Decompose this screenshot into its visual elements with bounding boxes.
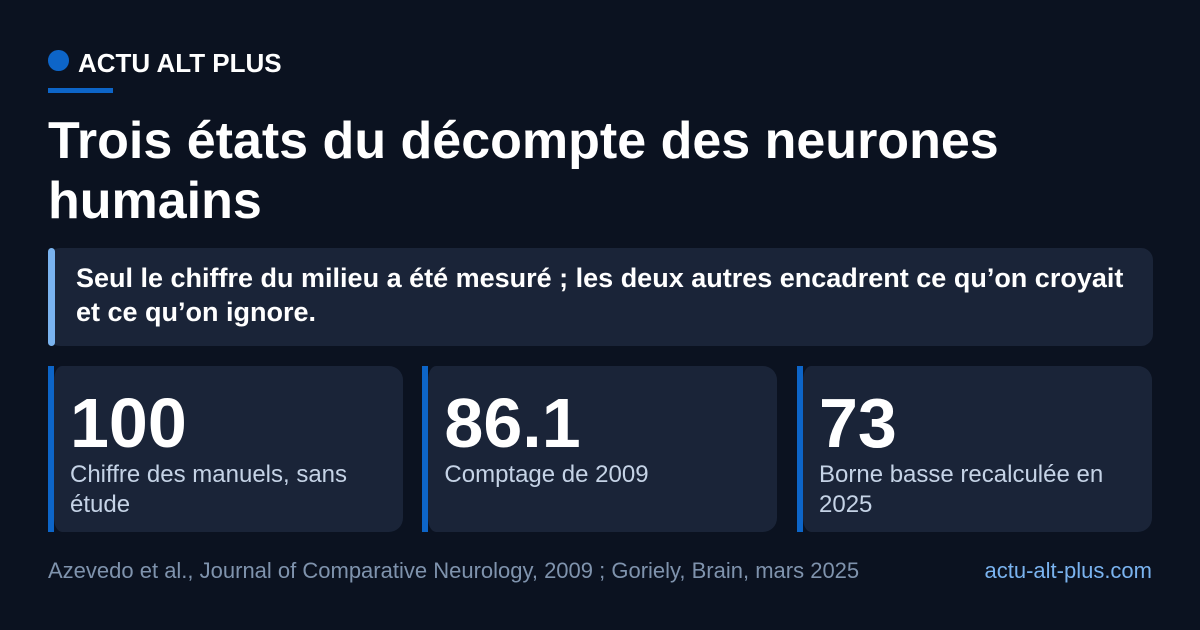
stat card: 100 [48, 366, 403, 532]
stat card: 73 [797, 366, 1152, 532]
card background [428, 366, 777, 532]
brand header [48, 48, 282, 93]
key message text: et ce qu’on ignore. [76, 297, 316, 327]
card accent [422, 366, 428, 532]
site url: actu-alt-plus.com [984, 558, 1152, 583]
label: Comptage de 2009 [444, 461, 649, 488]
sources: Azevedo et al., Journal of Comparative Neurology, 2009 ; Goriely, Brain, mars 2025 [48, 558, 859, 583]
panel: key message [48, 248, 1152, 346]
label [70, 461, 347, 518]
title: Trois états du décompte des neurones [48, 112, 999, 170]
label: étude [70, 491, 130, 518]
stat card: 86.1 [422, 366, 777, 532]
key message text [76, 263, 1124, 327]
card background [803, 366, 1152, 532]
card accent [797, 366, 803, 532]
number: 86.1 [444, 384, 581, 462]
title: humains [48, 172, 262, 230]
accent bar [48, 248, 54, 346]
key message text: Seul le chiffre du milieu a été mesuré ; les deux autres encadrent ce qu’on croyait [76, 263, 1123, 293]
number: 100 [70, 384, 187, 462]
label: 2025 [819, 491, 872, 518]
icon: brand dot [48, 50, 68, 70]
label: Borne basse recalculée en [819, 461, 1103, 488]
label [819, 461, 1103, 518]
brand name: ACTU ALT PLUS [78, 48, 282, 78]
card background [54, 366, 403, 532]
label: Chiffre des manuels, sans [70, 461, 347, 488]
number: 73 [819, 384, 897, 462]
title [48, 112, 999, 230]
card accent [48, 366, 54, 532]
brand underline [48, 88, 112, 93]
